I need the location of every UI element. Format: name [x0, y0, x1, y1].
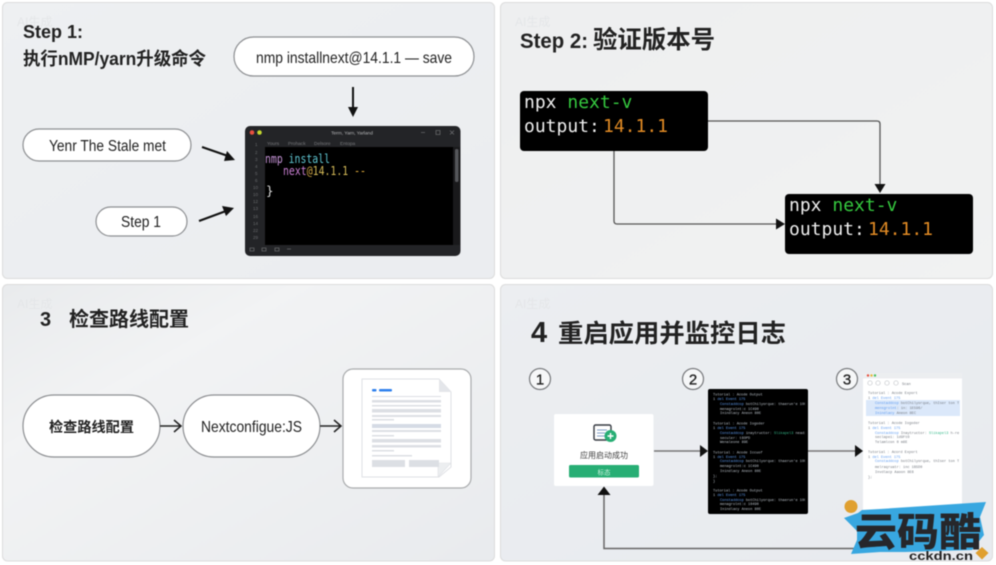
- arrow: card to terminal: [654, 445, 708, 457]
- dark terminal log: 1 del Event 175: [713, 455, 745, 460]
- title: step 2: Step 2:: [520, 30, 588, 53]
- title: step 4: 4: [531, 317, 547, 349]
- light log window: Tutorial : Acode Export: [868, 391, 918, 396]
- dark terminal log: menagrolnt:c 10490: [720, 502, 759, 507]
- code box: source: [520, 91, 708, 151]
- icon: app success: [594, 425, 616, 442]
- dark terminal log: Constaddcop botChilyorque: thaerun'e 100TS_shor: [720, 459, 821, 464]
- light log window: 1 del Event 175: [868, 396, 900, 401]
- dark terminal log: menagrolnt:c 1C490: [720, 464, 759, 469]
- step marker 1: 1: [536, 372, 544, 388]
- terminal window: 1: [255, 142, 258, 147]
- light log window: 1 del Event 175: [868, 426, 900, 431]
- arrow: right then down: [708, 121, 886, 193]
- terminal window: next@14.1.1 --: [283, 163, 366, 178]
- terminal window: Delsore: [314, 141, 331, 147]
- document card: [343, 369, 471, 488]
- terminal window: 4: [255, 164, 258, 169]
- terminal window: 22: [253, 228, 259, 233]
- dark terminal log: 1 del Event 175: [713, 493, 745, 498]
- title: step 1: Step 1:: [23, 22, 83, 42]
- dark terminal log: }: [713, 479, 715, 484]
- pill: yarn: Yenr The Stale met: [49, 138, 167, 155]
- arrow: down then right: [614, 151, 785, 230]
- logo: watermark: 云码酷: [855, 502, 981, 558]
- light log window: Constaddcop botChilyorque, thIser ton Tr 100TS_shor: [875, 401, 985, 406]
- code box: source: npx next-v: [524, 92, 632, 113]
- dark terminal log: Tutorial : Acode Output: [713, 488, 763, 494]
- terminal window: 10: [253, 185, 259, 190]
- light log window: Tutorial : Acode Iogoder: [868, 421, 920, 426]
- light log window: Telamlcon 0 m8E: [875, 440, 907, 445]
- dark terminal log: Tutorial : Acode Iogoder: [713, 422, 765, 426]
- pill: yarn: [23, 129, 191, 161]
- pill: install command: [234, 37, 474, 76]
- dark terminal log: Tutorial : Acode Iccuof: [713, 450, 763, 456]
- dark terminal log: Constaddcop botChilyorque: thaerun'e 100TS_shor: [720, 498, 821, 503]
- arrow: feedback loop to card: [598, 486, 903, 548]
- panel: step 4: [500, 284, 992, 561]
- dark terminal log: Inindlacy Aneon 80E: [720, 469, 761, 474]
- light log window: mensgrolnt: in: 1E596/: [875, 406, 922, 411]
- code box: result: npx next-v: [789, 195, 897, 216]
- light log window: seclapei: 1d9Ft0: [875, 435, 910, 440]
- arrow: yarn to terminal: [202, 147, 235, 161]
- pill: next config: [183, 395, 320, 457]
- step marker 3: [836, 368, 858, 390]
- terminal window: 12: [253, 199, 259, 204]
- light log window: [863, 374, 962, 510]
- dark terminal log: Constaddcop botChilyorque: thaerun'e 100TS_shor: [720, 402, 821, 407]
- arrow: to document: [320, 420, 341, 432]
- dark terminal log: Constaddcop inaytructor: Slikapel3 neadines: [720, 431, 813, 436]
- terminal window: 6: [255, 178, 258, 183]
- panel: step 3: [2, 284, 494, 561]
- arrow: terminal to log window: [808, 445, 863, 457]
- title: step 4: 重启应用并监控日志: [558, 319, 786, 348]
- light log window: Constaddcop botChilyorque, thIser ton Tr 100TS_shor: [875, 459, 985, 464]
- dark terminal log: Tutorial : Acode Output: [713, 392, 763, 398]
- code box: result: [785, 194, 973, 254]
- light log window: Tutorial : Acord Export: [868, 450, 918, 455]
- dark terminal log: };: [713, 474, 717, 479]
- pill: check route config: 检查路线配置: [49, 419, 134, 435]
- terminal window: 10: [253, 192, 259, 197]
- light log window: Inindlacy Aneon 8EC: [875, 411, 916, 416]
- terminal window: }: [266, 183, 274, 198]
- terminal window: Prohack: [288, 141, 306, 147]
- logo: watermark: cckdn.cn: [909, 549, 973, 563]
- panel: step 1: [2, 2, 494, 278]
- dark terminal log: 1 del Event 175: [713, 397, 745, 402]
- arrow: command to terminal: [348, 87, 358, 117]
- light log window: 1 del Event 175: [868, 455, 900, 460]
- terminal window: nmp install: [265, 151, 330, 166]
- terminal window: 13: [253, 206, 259, 211]
- light log window: melraqruatr: inc 1B5D0: [875, 465, 922, 470]
- title: step 1: 执行nMP/yarn升级命令: [23, 48, 206, 69]
- terminal window: 5: [255, 171, 258, 176]
- light log window: Scan: [902, 383, 911, 387]
- stamp: panel 3 watermark: AI生成: [17, 297, 52, 311]
- stamp: panel 1 watermark: AI生成: [17, 15, 52, 29]
- terminal window: 14: [253, 221, 259, 226]
- terminal window: 29: [253, 235, 259, 240]
- pill: next config: Nextconfigue:JS: [201, 419, 302, 436]
- title: step 3: 检查路线配置: [69, 307, 189, 331]
- title: step 2: 验证版本号: [593, 26, 715, 54]
- pill: step 1: [96, 207, 187, 236]
- stamp: panel 2 watermark: AI生成: [515, 15, 550, 29]
- terminal window: 2: [255, 150, 258, 155]
- step marker 1: [530, 368, 550, 390]
- terminal window: Term, Yarn, Yarland: [331, 130, 373, 136]
- dark terminal log: seculer: t6OPD: [720, 436, 750, 441]
- code box: source: 14.1.1: [603, 116, 668, 137]
- dark terminal log: [708, 389, 821, 514]
- dark terminal log: Inindlacy Aneon 80E: [720, 411, 761, 416]
- step marker 2: 2: [689, 372, 697, 388]
- light log window: };: [868, 475, 872, 480]
- card: app started: 应用启动成功: [580, 450, 628, 460]
- dark terminal log: 1 del Event 175: [713, 426, 745, 431]
- terminal window: Entopa: [340, 141, 356, 147]
- light log window: Invdlacp Aaoon 8E6: [875, 470, 914, 475]
- pill: install command: nmp installnext@14.1.1 — save: [256, 50, 452, 67]
- panel: step 2: [500, 2, 992, 278]
- step marker 2: [682, 368, 704, 390]
- title: step 3: 3: [40, 309, 51, 331]
- terminal window: 16: [253, 214, 259, 219]
- arrow: to next config: [160, 420, 181, 432]
- arrow: step 1 to terminal: [199, 206, 234, 221]
- code box: result: output:: [789, 219, 865, 240]
- stamp: panel 4 watermark: AI生成: [515, 297, 550, 311]
- step marker 3: 3: [843, 372, 851, 388]
- pill: check route config: [23, 395, 160, 457]
- code box: source: output:: [524, 116, 600, 137]
- button: green status: 标态: [598, 468, 611, 476]
- pill: step 1: Step 1: [121, 214, 161, 231]
- code box: result: 14.1.1: [868, 219, 933, 240]
- terminal window: [245, 126, 460, 256]
- terminal window: Yours: [267, 141, 280, 147]
- dark terminal log: menagrolnt:c 1C490: [720, 407, 759, 412]
- light log window: Constaddcop Inaytructor: Slikapel3 h-readines: [875, 431, 972, 436]
- terminal window: 3: [255, 157, 258, 162]
- dark terminal log: Wenaleone 89E: [720, 440, 748, 445]
- dark terminal log: Inindlacy Aneon 80E: [720, 507, 761, 512]
- title: step 2: [520, 26, 715, 54]
- card: app started: [554, 414, 654, 486]
- title: step 1: [23, 22, 206, 69]
